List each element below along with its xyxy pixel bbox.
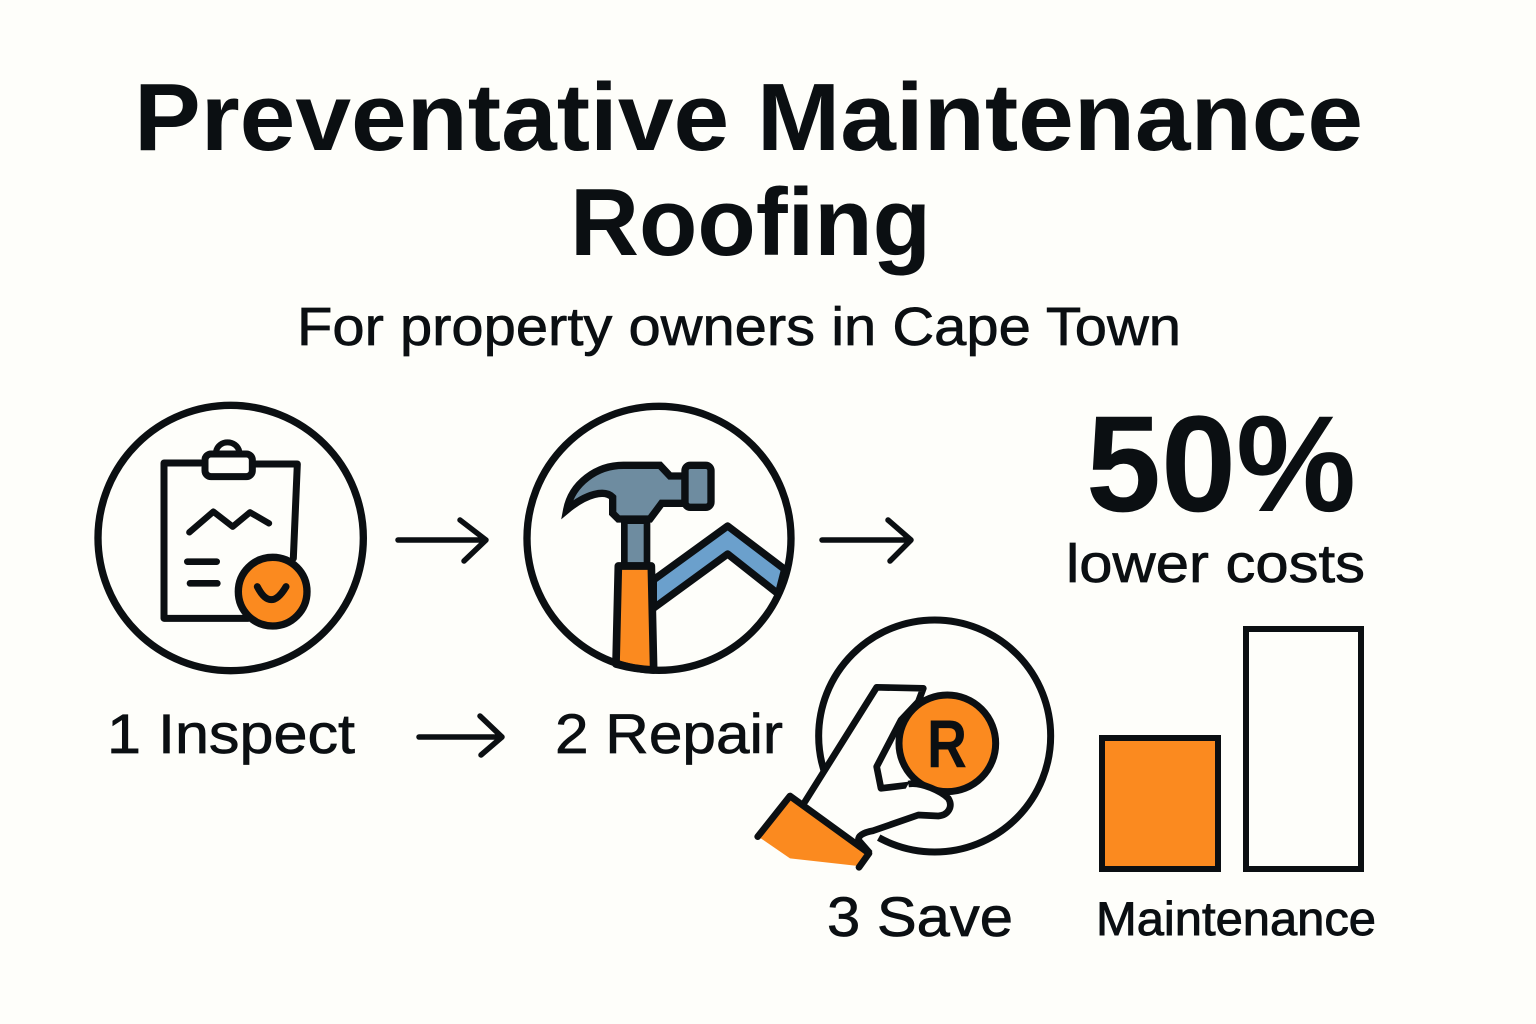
chart label: Maintenance xyxy=(1096,892,1376,945)
arrow: repair to result xyxy=(822,520,911,561)
subtitle: For property owners in Cape Town xyxy=(297,297,1181,357)
label: step 3: 3 Save xyxy=(827,885,1013,948)
bar: maintenance xyxy=(1102,738,1218,869)
label: step 2: 2 Repair xyxy=(555,702,783,765)
stat caption: lower costs xyxy=(1066,534,1365,594)
icon: save hand with rand coin xyxy=(758,620,1051,867)
arrow: step 1 to step 2 xyxy=(419,716,502,755)
bar: no maintenance xyxy=(1246,629,1361,869)
title: Preventative Maintenance xyxy=(134,64,1363,171)
bar chart: cost comparison xyxy=(1102,629,1361,869)
label: step 1: 1 Inspect xyxy=(107,702,355,765)
icon: inspect clipboard xyxy=(98,405,363,671)
title xyxy=(134,64,1363,276)
title: Roofing xyxy=(570,169,931,276)
icon: repair hammer and roof xyxy=(527,406,791,670)
stat: 50 percent: 50% xyxy=(1086,388,1356,541)
icon: save hand with rand coin: R xyxy=(927,706,967,782)
arrow: inspect to repair xyxy=(398,520,486,561)
